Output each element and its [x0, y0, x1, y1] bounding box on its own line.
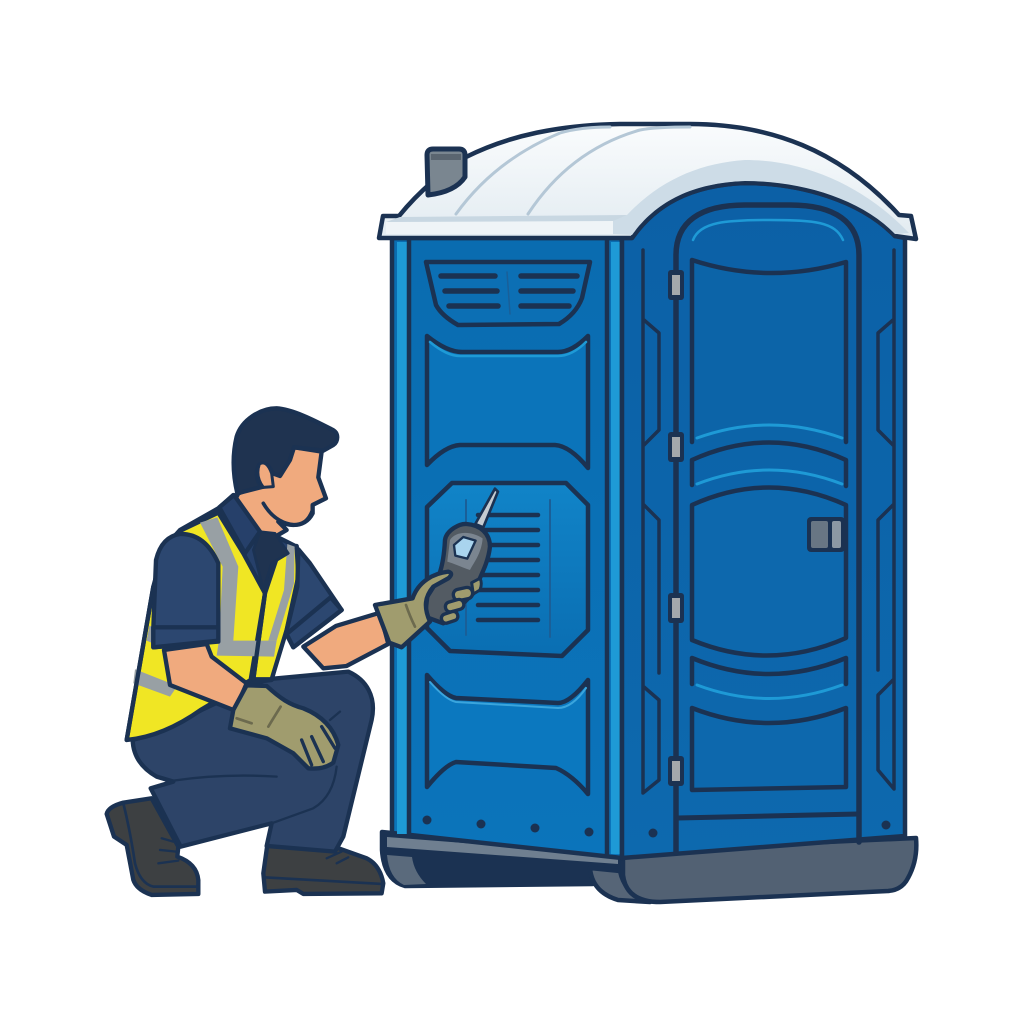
hi-vis vest	[127, 513, 298, 740]
rivets right	[648, 820, 890, 838]
neck and face	[233, 447, 326, 542]
right face of cabin	[622, 183, 905, 858]
side recess strips	[643, 250, 894, 793]
door upper panel	[692, 220, 846, 790]
right forearm	[303, 613, 388, 668]
worker	[107, 408, 498, 895]
portable toilet	[379, 124, 916, 902]
hair	[234, 408, 337, 493]
door latch	[807, 517, 845, 552]
top vent	[426, 262, 590, 325]
left sleeve	[153, 534, 218, 647]
reflective strips	[133, 517, 295, 697]
left glove	[230, 685, 338, 769]
roof ribs	[456, 127, 690, 214]
front boot	[263, 845, 383, 894]
rivets left	[422, 816, 594, 836]
gas detector tool	[425, 489, 498, 623]
door frame	[676, 205, 859, 852]
trousers	[133, 672, 373, 852]
roof vent	[427, 149, 465, 195]
lower panel	[427, 675, 588, 794]
door hinges	[668, 270, 684, 786]
base skid	[382, 832, 916, 902]
middle vented panel	[427, 483, 588, 656]
left face of cabin	[392, 238, 622, 858]
shirt collar	[219, 495, 288, 590]
roof	[379, 124, 916, 239]
right glove	[375, 572, 481, 647]
upper panel	[427, 336, 588, 468]
right sleeve	[286, 549, 342, 647]
torso shirt	[153, 495, 298, 690]
left arm	[164, 644, 247, 711]
back boot	[107, 798, 198, 895]
